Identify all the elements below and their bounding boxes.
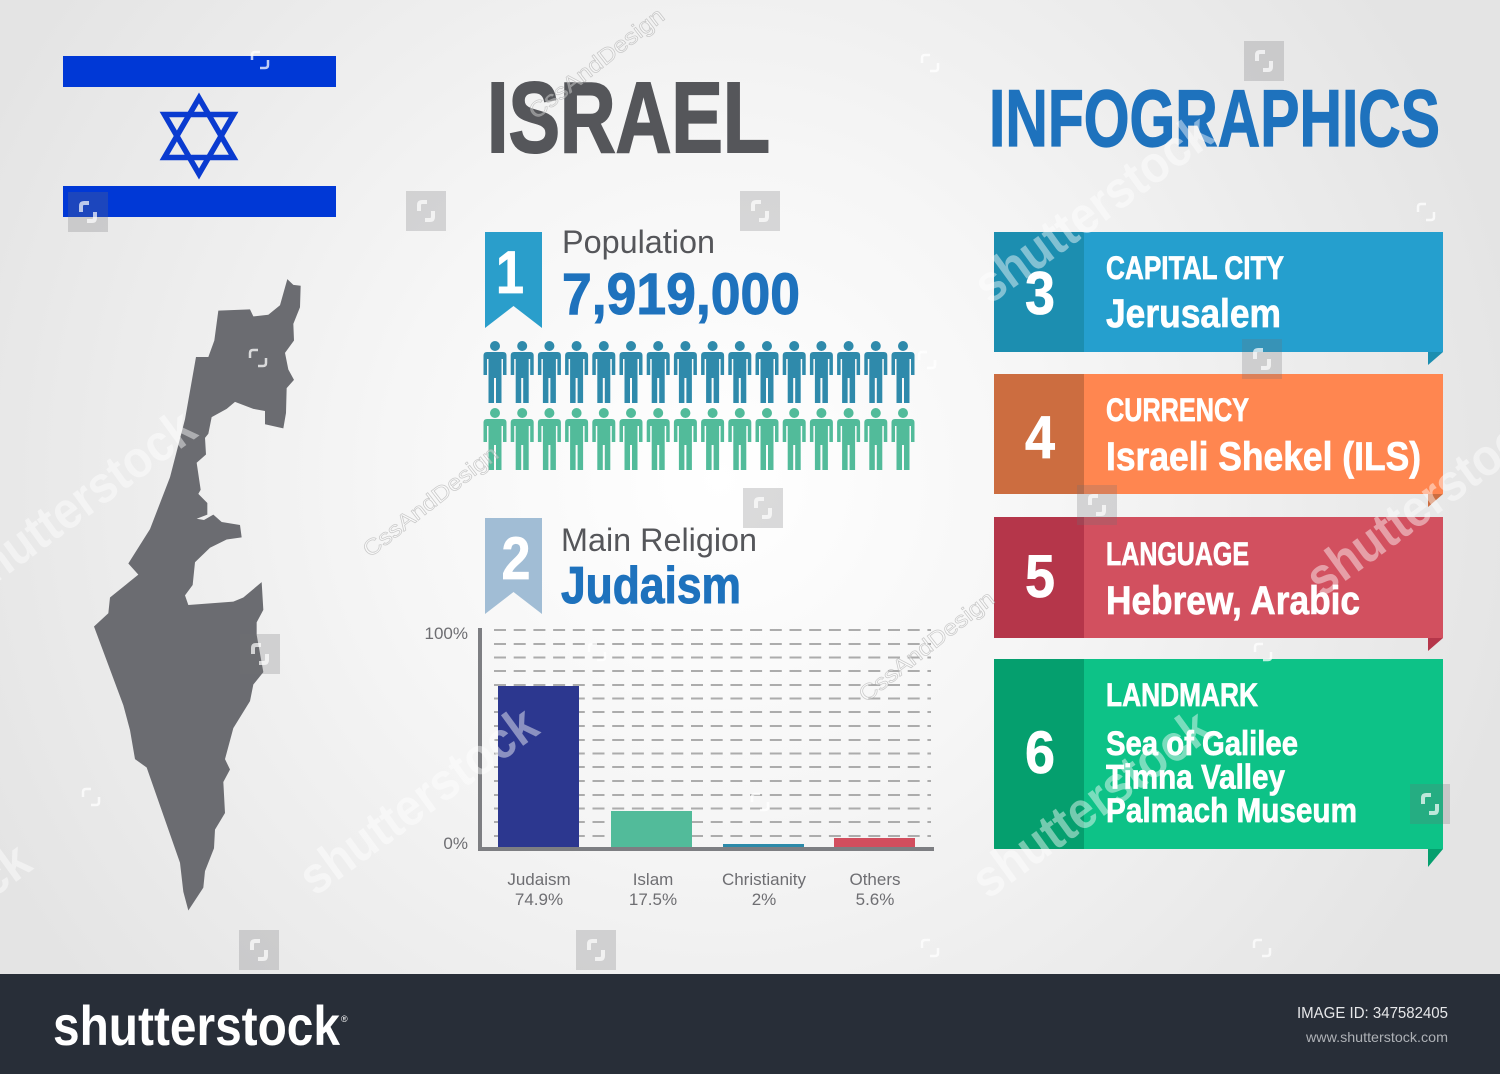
axis label 100%: 100% xyxy=(425,624,468,643)
population value: 7,919,000 xyxy=(562,262,800,327)
panel: main religion xyxy=(485,518,757,615)
bar: Judaism xyxy=(498,686,579,847)
religion value: Judaism xyxy=(561,557,741,615)
badge 2 xyxy=(485,518,542,614)
label: Islam: 17.5% xyxy=(629,890,677,909)
value: Hebrew, Arabic xyxy=(1106,579,1360,623)
number 6: 6 xyxy=(1025,719,1055,786)
panel: language xyxy=(994,517,1443,651)
value line 3: Palmach Museum xyxy=(1106,792,1357,830)
people row: blue xyxy=(484,341,914,403)
badge 2: 2 xyxy=(502,525,530,592)
badge 1 xyxy=(485,232,542,328)
shutterstock logo: shutterstock xyxy=(53,994,341,1057)
registered mark: ® xyxy=(341,1014,348,1024)
label: Christianity: Christianity xyxy=(722,870,806,889)
number 5: 5 xyxy=(1025,543,1055,610)
watermarks: shutterstock xyxy=(288,695,549,907)
number 4: 4 xyxy=(1025,404,1056,471)
people row: green xyxy=(484,408,914,470)
footer bar xyxy=(0,974,1500,1074)
value: Jerusalem xyxy=(1106,292,1281,336)
panel: capital city xyxy=(994,232,1443,365)
axis label 0%: 0% xyxy=(443,834,468,853)
watermarks: shutterstock xyxy=(963,103,1224,315)
value line 2: Timna Valley xyxy=(1106,758,1285,796)
label: Judaism: Judaism xyxy=(507,870,571,889)
map of Israel xyxy=(94,279,301,910)
heading: CURRENCY xyxy=(1106,392,1249,428)
axes xyxy=(480,628,934,849)
label: Islam: Islam xyxy=(633,870,673,889)
panel: currency xyxy=(994,374,1443,507)
heading: LANGUAGE xyxy=(1106,536,1249,572)
watermarks: shutterstock xyxy=(961,698,1222,910)
heading: LANDMARK xyxy=(1106,677,1258,713)
watermarks: CssAndDesign xyxy=(358,441,503,562)
label: Others: 5.6% xyxy=(856,890,894,909)
watermarks: CssAndDesign xyxy=(854,586,999,707)
heading: CAPITAL CITY xyxy=(1106,250,1284,286)
population label: Population xyxy=(562,224,715,260)
panel: landmark xyxy=(994,659,1443,867)
image id: IMAGE ID: 347582405 xyxy=(1297,1005,1448,1022)
bar: Christianity xyxy=(723,844,804,847)
label: Christianity: 2% xyxy=(752,890,776,909)
value line 1: Sea of Galilee xyxy=(1106,725,1298,763)
label: Others: Others xyxy=(849,870,901,889)
religion label: Main Religion xyxy=(561,522,757,558)
label: Judaism: 74.9% xyxy=(515,890,563,909)
bar: Islam xyxy=(611,811,692,847)
number 3: 3 xyxy=(1025,260,1055,327)
flag of Israel xyxy=(63,56,336,217)
panel: population xyxy=(484,224,914,470)
site url: www.shutterstock.com xyxy=(1305,1029,1448,1045)
value: Israeli Shekel (ILS) xyxy=(1106,435,1421,479)
bar chart: religions xyxy=(425,624,934,909)
bar: Others xyxy=(834,838,915,847)
title: Israel: ISRAEL xyxy=(487,62,770,174)
badge 1: 1 xyxy=(496,239,524,306)
watermarks: CssAndDesign xyxy=(524,3,669,124)
